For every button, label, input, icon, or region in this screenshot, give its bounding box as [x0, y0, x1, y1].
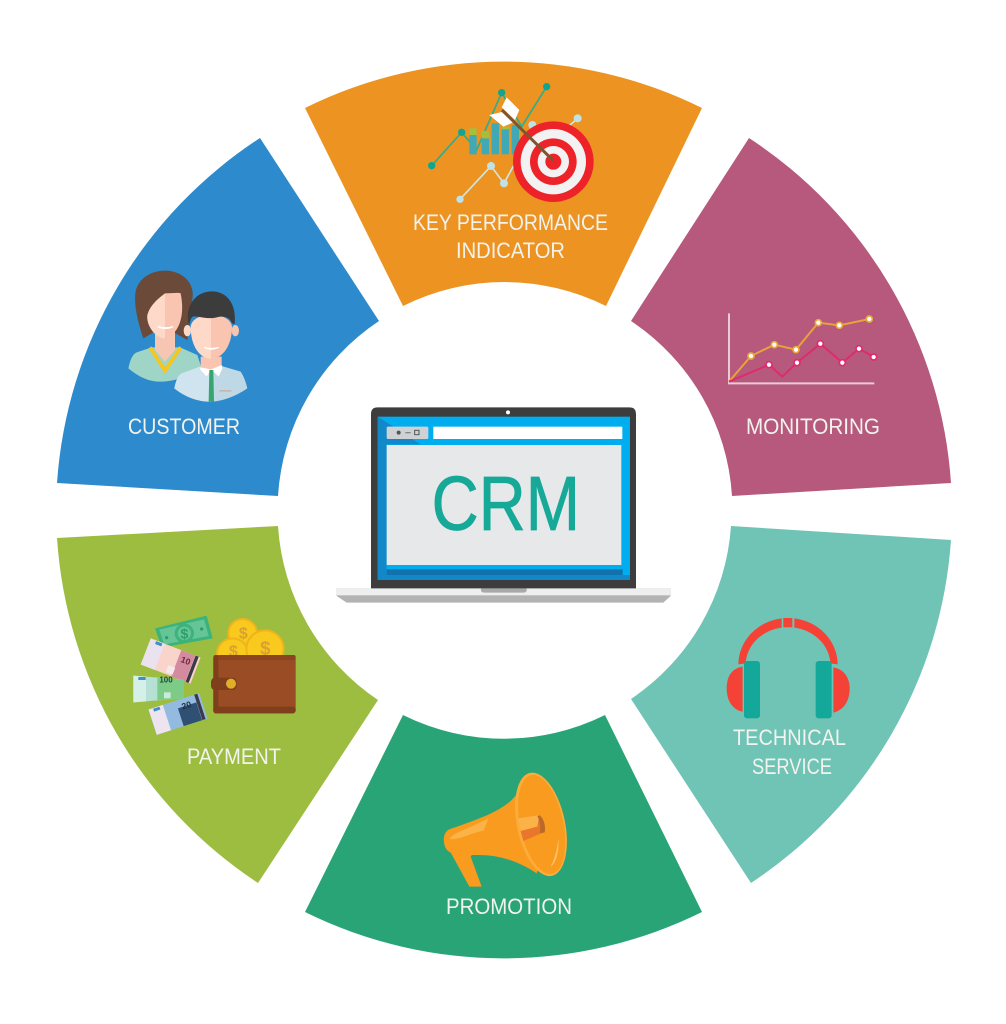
label: customer: CUSTOMER	[128, 414, 240, 439]
panel: monitoring	[631, 138, 951, 496]
panel: customer	[57, 138, 379, 496]
icon: target with arrow and charts	[428, 83, 594, 203]
panel: key performance indicator	[305, 62, 702, 306]
label: monitoring: MONITORING	[746, 414, 880, 439]
icon: megaphone	[444, 768, 575, 887]
CRM title: CRM	[432, 462, 580, 547]
icon: wallet and banknotes: $	[229, 644, 238, 661]
icon: line chart	[729, 313, 877, 383]
laptop base	[336, 588, 671, 603]
panel: payment	[57, 526, 378, 883]
laptop screen	[371, 407, 636, 588]
label: payment: PAYMENT	[187, 744, 281, 769]
icon: customers	[128, 271, 247, 402]
icon: wallet and banknotes: $	[260, 637, 271, 658]
icon: wallet and banknotes: 10	[179, 654, 192, 667]
centre laptop	[336, 407, 671, 603]
label: service: SERVICE	[752, 754, 832, 779]
icon: wallet and banknotes: $	[239, 625, 248, 642]
icon: wallet and banknotes: 100	[159, 675, 173, 684]
panel: technical service	[631, 526, 951, 883]
icon: wallet and banknotes: $	[180, 625, 188, 641]
icon: headphones	[727, 618, 850, 718]
label: indicator: INDICATOR	[456, 238, 565, 263]
icon: wallet and banknotes	[133, 616, 296, 735]
panel: promotion	[305, 715, 702, 958]
label: promotion: PROMOTION	[446, 894, 572, 919]
label: key performance: KEY PERFORMANCE	[413, 210, 608, 235]
icon: wallet and banknotes: 20	[180, 699, 193, 712]
label: technical: TECHNICAL	[733, 725, 846, 750]
